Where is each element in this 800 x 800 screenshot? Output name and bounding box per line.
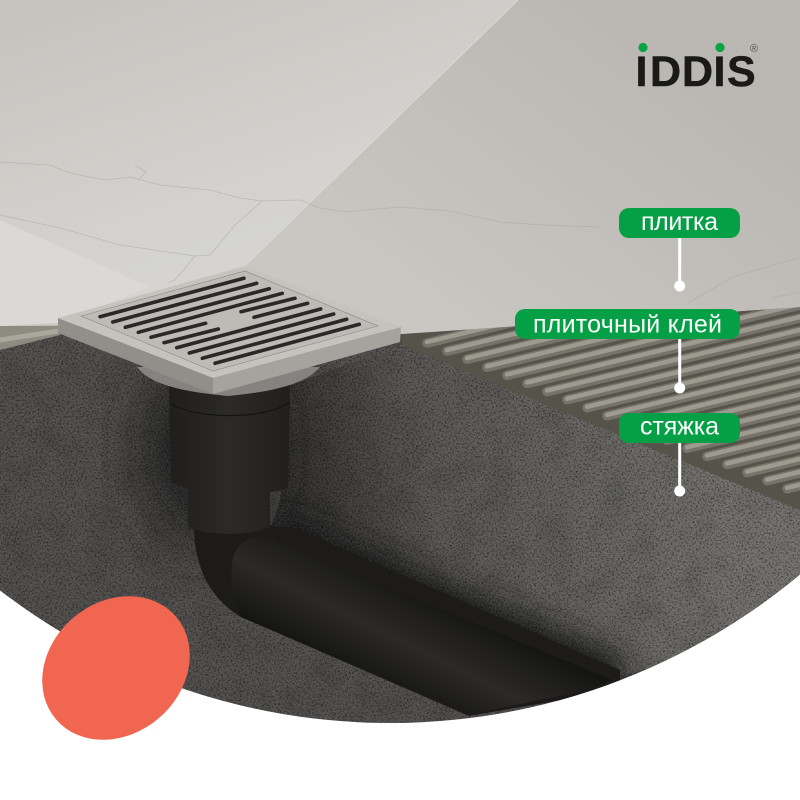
IDDIS logo: IDDIS [636, 48, 756, 96]
grate slots [100, 278, 359, 363]
callout: screed [619, 412, 740, 496]
callout: tile: плитка [641, 208, 718, 236]
marble veins [0, 162, 800, 303]
tile adhesive ribs [0, 307, 800, 510]
callout: screed: стяжка [640, 412, 719, 440]
black drain pipe [169, 385, 620, 716]
callout: tile [619, 208, 740, 292]
concrete screed [0, 326, 800, 723]
callout: tile adhesive [515, 309, 740, 394]
decorative coral ellipse [13, 566, 219, 770]
IDDIS logo: ® [750, 43, 758, 55]
marble floor tiles [0, 0, 800, 334]
callout: tile adhesive: плиточный клей [533, 310, 722, 338]
square drain grate [58, 266, 401, 396]
